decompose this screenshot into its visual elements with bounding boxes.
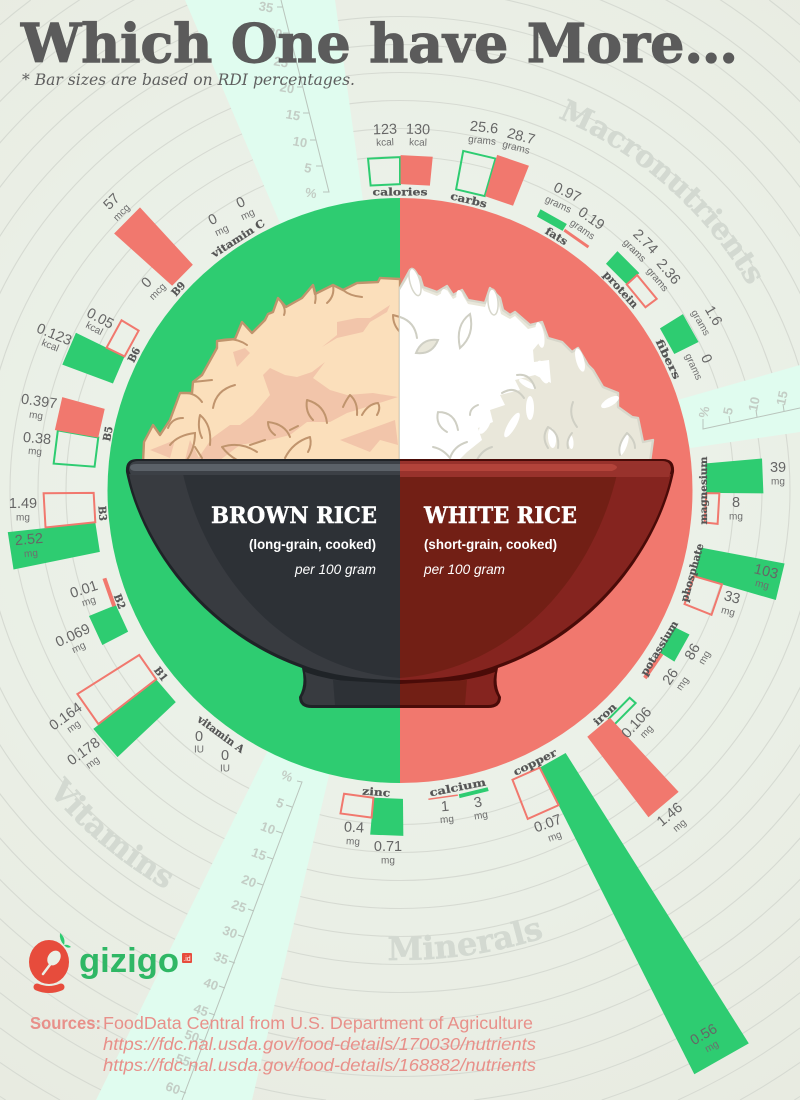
bars: iron — [584, 697, 689, 835]
bars: zinc: zinc — [362, 785, 391, 800]
labels: vitamin C: mg — [239, 207, 257, 223]
bowl label: white rice: WHITE RICE — [423, 503, 577, 529]
bars: B1: 0.164 — [47, 700, 85, 734]
scale band: bottom: 5 — [274, 795, 286, 811]
bowl label: white rice: per 100 gram — [423, 561, 505, 577]
bars: fats: 0.97 — [551, 180, 583, 206]
bars: B9: mcg — [111, 202, 133, 224]
bars: copper: 0.56 — [688, 1021, 720, 1049]
bars: carbs: grams — [501, 139, 531, 157]
bars: calories: 123 — [373, 122, 397, 138]
bars: calories: calories — [372, 186, 428, 198]
bars: B6: kcal — [40, 338, 60, 354]
bars: B5 — [20, 392, 116, 469]
scale band: top: % — [304, 185, 318, 201]
section heading: Minerals: Minerals — [388, 920, 542, 960]
bars: B5: mg — [28, 446, 42, 458]
labels: vitamin C: 0 — [234, 194, 248, 212]
section heading: Macronutrients: Macronutrients — [558, 98, 761, 284]
bars: fats: grams — [567, 218, 597, 242]
bars: copper: mg — [703, 1039, 721, 1055]
bars: protein: protein — [600, 269, 641, 311]
bars: B2: 0.01 — [68, 578, 100, 602]
bowl label: white rice: (short-grain, cooked) — [424, 537, 557, 552]
bars: fibers: fibers — [653, 337, 683, 381]
bars: zinc: mg — [346, 836, 360, 848]
scale band: bottom: 40 — [202, 974, 220, 994]
bars: B9 — [101, 191, 195, 303]
scale band: bottom — [96, 740, 335, 1100]
bars: carbs: grams — [468, 134, 496, 148]
scale band: bottom: 50 — [183, 1026, 201, 1046]
logo: gizigo: .id — [183, 956, 191, 963]
bars: B2: B2 — [111, 592, 128, 611]
bars: calcium — [428, 777, 489, 826]
sources: Sources: — [30, 1013, 101, 1033]
bars: B1: mg — [84, 754, 102, 772]
illustration: brown rice mound — [143, 278, 400, 462]
title: Which One have More… — [20, 13, 738, 75]
bars: potassium: mg — [675, 675, 691, 693]
bars: iron: 1.46 — [654, 800, 686, 830]
bars: magnesium — [698, 456, 786, 524]
bars: B6 — [34, 305, 143, 386]
bars: fibers: grams — [682, 352, 704, 382]
bars: calories: kcal — [376, 137, 394, 149]
labels: vitamin C: mg — [213, 223, 231, 239]
bars: iron: iron — [591, 701, 620, 728]
bowl label: brown rice — [211, 503, 377, 577]
scale band: top: 15 — [285, 106, 301, 124]
bars: calories: kcal — [409, 137, 427, 149]
bars: B5: 0.397 — [20, 392, 58, 412]
bars: phosphate: mg — [720, 605, 736, 619]
bars: B2: mg — [70, 640, 88, 656]
scale band: top — [185, 0, 365, 235]
bars: zinc: 0.71 — [374, 839, 402, 855]
scale band: top: 10 — [292, 133, 308, 151]
scale band: top: 5 — [303, 160, 313, 176]
sources — [30, 1013, 536, 1075]
section heading: Vitamins: Vitamins — [54, 776, 172, 888]
sources: https://fdc.nal.usda.gov/food-details/168882/nutrients — [103, 1055, 536, 1075]
bars: B3: 1.49 — [9, 496, 37, 512]
bars: protein — [600, 226, 683, 311]
bars: B6: 0.123 — [34, 321, 74, 349]
bars: protein: 2.74 — [629, 226, 661, 258]
bars: fibers: 1.6 — [701, 303, 725, 329]
bars: B5: 0.38 — [22, 430, 52, 448]
bars: phosphate — [679, 542, 785, 619]
bars: B9: 0 — [138, 274, 156, 292]
bars: B5: mg — [28, 410, 44, 422]
labels: vitamin A: 0 — [221, 748, 229, 764]
scale band: top: 20 — [279, 79, 295, 97]
bars: magnesium: mg — [729, 512, 743, 522]
bars: zinc: mg — [381, 856, 395, 866]
scale band: top: 30 — [267, 24, 283, 42]
bars: magnesium: magnesium — [698, 456, 710, 524]
bars: calcium: calcium — [429, 777, 487, 799]
bars: fats: 0.19 — [575, 204, 607, 234]
bars: phosphate: 33 — [722, 588, 742, 608]
scale band: bottom: % — [279, 767, 295, 785]
bars: B9: mcg — [147, 281, 169, 303]
bars: B1: mg — [65, 718, 83, 736]
bars: carbs: 25.6 — [469, 119, 499, 137]
bars: calcium: mg — [440, 814, 454, 826]
bars: protein: 2.36 — [653, 256, 683, 288]
labels: vitamin A — [194, 713, 247, 774]
bars: magnesium: 39 — [770, 460, 786, 476]
scale band: bottom: 20 — [240, 871, 258, 891]
bars: B1: B1 — [151, 665, 170, 684]
scale band: right: 10 — [745, 395, 763, 413]
logo: gizigo — [29, 933, 192, 990]
bars: copper: copper — [511, 747, 559, 779]
scale band: bottom: 45 — [192, 1000, 210, 1020]
bars: iron: mg — [671, 817, 689, 835]
bars: carbs — [449, 119, 537, 211]
bars: protein: grams — [620, 237, 648, 265]
bars: fibers — [653, 303, 725, 382]
bars: B2: mg — [81, 595, 97, 609]
bars: zinc — [340, 785, 405, 866]
scale band: right: % — [695, 404, 713, 419]
bars: magnesium: 8 — [732, 495, 740, 511]
bars: B1 — [47, 652, 178, 772]
bars: B2 — [53, 578, 129, 656]
scale band: bottom: 15 — [250, 844, 268, 864]
scale band: bottom: 35 — [212, 948, 230, 968]
illustration: bowl, brown rice side — [126, 459, 400, 708]
bars: iron: mg — [638, 723, 656, 741]
labels: vitamin A: IU — [220, 764, 230, 774]
sources: https://fdc.nal.usda.gov/food-details/170030/nutrients — [103, 1034, 536, 1054]
bars: B3: mg — [16, 512, 30, 524]
bars: fibers: 0 — [697, 352, 715, 366]
bowl label: brown rice: BROWN RICE — [211, 503, 377, 529]
scale band: bottom: 25 — [230, 896, 248, 916]
bars: calories — [368, 122, 433, 198]
central circle — [108, 198, 693, 783]
scale band: top: 25 — [273, 53, 289, 71]
logo icon — [29, 933, 71, 990]
illustration: white rice mound — [400, 267, 653, 462]
bowl label: white rice — [423, 503, 577, 577]
scale band: right: 15 — [773, 389, 791, 407]
labels: vitamin C: vitamin C — [209, 217, 267, 261]
scale band: bottom: 60 — [164, 1078, 182, 1098]
bars: B3 — [8, 491, 108, 569]
subtitle note: * Bar sizes are based on RDI percentages. — [22, 70, 355, 89]
sources: FoodData Central from U.S. Department of Agriculture — [103, 1013, 533, 1033]
bars: B5: B5 — [101, 425, 116, 442]
bars: fats: fats — [543, 225, 570, 248]
bars: calcium: 3 — [473, 794, 483, 812]
bars: fibers: grams — [688, 308, 712, 338]
bars: potassium — [639, 619, 713, 693]
bars: calories: 130 — [406, 122, 430, 138]
bars: fats — [537, 180, 607, 248]
labels: vitamin C: 0 — [206, 211, 220, 229]
bowl label: brown rice: (long-grain, cooked) — [249, 537, 376, 552]
bars: B9: 57 — [101, 191, 123, 213]
bars: calcium: mg — [473, 809, 489, 823]
bars: potassium: potassium — [639, 619, 681, 678]
bowl label: brown rice: per 100 gram — [294, 561, 376, 577]
illustration: bowl, white rice side — [400, 459, 674, 708]
bars: potassium: 86 — [682, 641, 704, 663]
bars: B3: mg — [24, 548, 38, 560]
bars: phosphate: mg — [754, 578, 770, 592]
bars: B2: 0.069 — [53, 621, 93, 651]
bars: B6: kcal — [84, 320, 104, 338]
bars: carbs: 28.7 — [505, 126, 537, 148]
bars: B6: B6 — [126, 346, 143, 365]
bars: B1: 0.178 — [65, 735, 103, 769]
bars: B3: 2.52 — [14, 531, 44, 549]
scale band: right — [660, 365, 800, 451]
bars: B3: B3 — [95, 506, 108, 521]
bars: iron: 0.106 — [619, 704, 655, 742]
bars: protein: grams — [644, 266, 670, 294]
bars: copper: 0.07 — [532, 812, 564, 836]
bars: fats: grams — [543, 194, 573, 216]
bars: carbs: carbs — [449, 190, 488, 211]
scale band: bottom: 55 — [174, 1050, 192, 1070]
bars: phosphate: phosphate — [679, 542, 707, 603]
bars: zinc: 0.4 — [344, 819, 364, 837]
scale band: bottom: 30 — [221, 922, 239, 942]
bars: B9: B9 — [169, 280, 188, 299]
logo: gizigo: gizigo — [79, 942, 179, 980]
scale band: right: 5 — [720, 406, 736, 416]
bars: phosphate: 103 — [752, 561, 780, 583]
labels: vitamin C — [206, 194, 267, 261]
labels: vitamin A: IU — [194, 744, 204, 756]
bars: magnesium: mg — [771, 476, 785, 488]
bars: copper: mg — [547, 829, 563, 845]
bars: copper — [511, 745, 749, 1074]
bars: calcium: 1 — [440, 799, 450, 815]
bars: potassium: mg — [697, 649, 713, 667]
bars: B6: 0.05 — [84, 305, 116, 333]
scale band: bottom: 10 — [259, 818, 277, 838]
labels: vitamin A: vitamin A — [194, 713, 247, 756]
bars: potassium: 26 — [660, 666, 682, 688]
labels: vitamin A: 0 — [195, 729, 203, 745]
